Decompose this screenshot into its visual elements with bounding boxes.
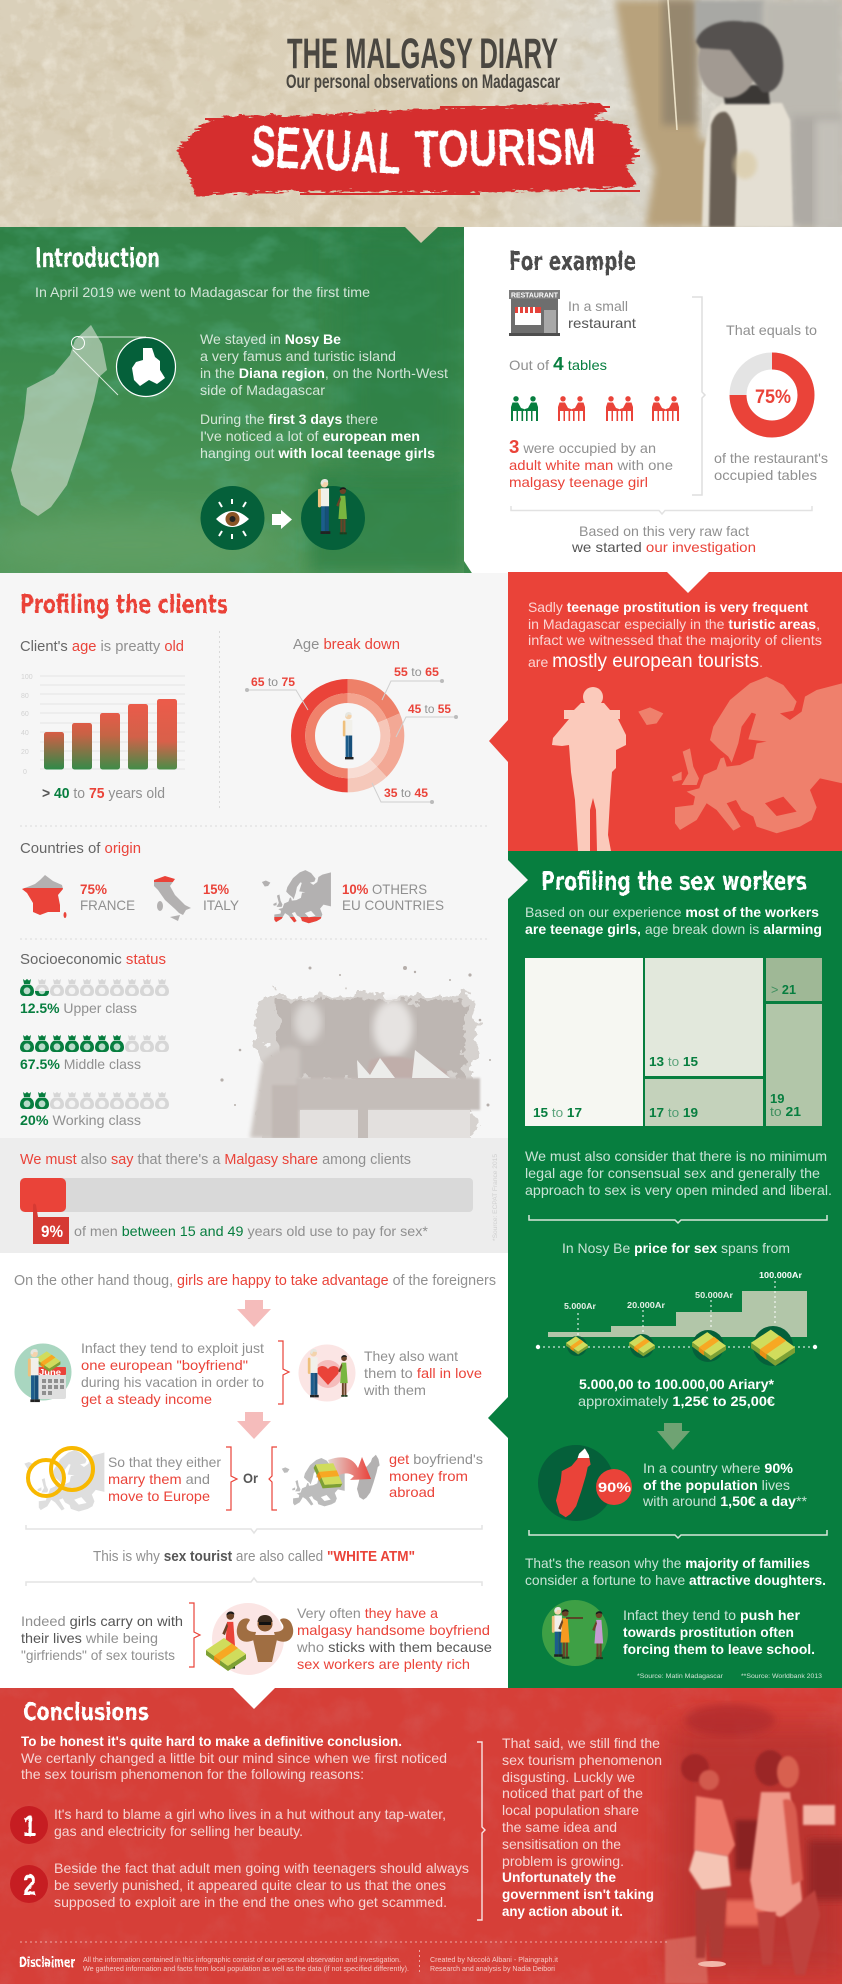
icon: man with calendar and money xyxy=(14,1344,72,1402)
chart: price steps xyxy=(536,1271,817,1366)
map of Madagascar xyxy=(11,325,107,516)
panel: teenage prostitution xyxy=(489,572,842,851)
bar chart: age: 80 xyxy=(21,693,29,700)
bracket xyxy=(692,297,705,495)
text: one boyfriend: one european "boyfriend" xyxy=(81,1357,248,1373)
text: population: In a country where 90% xyxy=(643,1460,794,1476)
panel: profiling the clients xyxy=(0,573,508,1155)
text: reason 1: It's hard to blame a girl who lives in a hut without any tap-water, xyxy=(54,1806,446,1822)
text: push her xyxy=(623,1607,815,1657)
text: intro to conclusion: the sex tourism phenomenon for the following reasons: xyxy=(21,1766,364,1782)
text: girls carry on: their lives while being xyxy=(21,1630,158,1646)
text: money from abroad: money from xyxy=(389,1468,468,1484)
icon: couple with heart xyxy=(298,1344,356,1402)
heading: socioeconomic status: Socioeconomic status xyxy=(20,951,166,968)
text: small restaurant: In a small xyxy=(568,298,628,314)
treemap: age break down: 15 to 17 xyxy=(533,1105,582,1120)
heading: countries of origin: Countries of origin xyxy=(20,840,141,857)
map: France xyxy=(22,875,66,918)
text: still disgusting xyxy=(502,1735,662,1919)
icons: upper class bags xyxy=(20,979,169,996)
brackets with Or xyxy=(226,1447,277,1510)
text: small restaurant: restaurant xyxy=(568,315,636,331)
text: investigation: Based on this very raw fact xyxy=(579,523,749,539)
icon: restaurant xyxy=(509,290,560,336)
callouts: age labels xyxy=(245,665,458,804)
text: three were occupied: 3 were occupied by an xyxy=(509,437,656,457)
panel: malgasy share xyxy=(0,1138,508,1253)
text: investigation: we started our investigation xyxy=(571,539,756,555)
text: other EU share: EU COUNTRIES xyxy=(342,897,444,913)
arrow xyxy=(272,510,292,529)
brace xyxy=(529,1215,827,1223)
text: Nosy Be: We stayed in Nosy Be xyxy=(200,331,341,347)
text: families: consider a fortune to have attractive doughters. xyxy=(525,1572,826,1588)
text: fall in love: with them xyxy=(363,1382,426,1398)
text: one boyfriend xyxy=(81,1340,264,1407)
text: three were occupied: malgasy teenage girl xyxy=(509,474,648,490)
text: Nosy Be: a very famus and turistic island xyxy=(200,348,396,364)
text: still disgusting: sex tourism phenomenon xyxy=(502,1752,662,1768)
icon: tourist silhouette xyxy=(552,687,626,851)
panel: introduction xyxy=(0,227,472,573)
text: still disgusting: disgusting. Luckly we xyxy=(502,1769,635,1785)
text: money from abroad: abroad xyxy=(389,1484,435,1500)
badge: reason 1 xyxy=(10,1806,48,1844)
text: France share: FRANCE xyxy=(80,897,135,913)
arrow to example panel xyxy=(464,561,485,625)
arrow down xyxy=(657,1423,690,1450)
text: three were occupied xyxy=(509,437,673,490)
text: reason 1: gas and electricity for selling her beauty. xyxy=(54,1823,303,1839)
donut: 75 percent xyxy=(738,361,806,429)
text: still disgusting: any action about it. xyxy=(502,1903,623,1919)
text: occupied tables: of the restaurant's xyxy=(714,450,828,466)
panel: conclusions xyxy=(0,1688,842,1984)
icon: Madagascar 90 percent: 90% xyxy=(598,1479,632,1495)
text: one boyfriend: Infact they tend to exploit just xyxy=(81,1340,264,1356)
treemap: age break down: to 21 xyxy=(770,1104,801,1119)
icon: restaurant: RESTAURANT xyxy=(511,292,559,300)
text: fall in love: They also want xyxy=(364,1348,458,1364)
footnotes: *Source: Matin Madagascar xyxy=(637,1673,724,1680)
map: Europe xyxy=(638,677,842,833)
text: price amount: 5.000,00 to 100.000,00 Ariary* xyxy=(579,1376,775,1392)
text: push her: towards prostitution often xyxy=(623,1624,794,1640)
text: handsome boyfriend: malgasy handsome boyfriend xyxy=(297,1622,490,1638)
text: girls carry on: Indeed girls carry on with xyxy=(21,1613,183,1629)
bar chart: age: 20 xyxy=(21,749,29,756)
text: intro to conclusion xyxy=(21,1733,447,1782)
text: still disgusting: the same idea and xyxy=(502,1819,617,1835)
icon: man and teenage girl xyxy=(301,479,365,550)
text: fall in love xyxy=(363,1348,482,1398)
text: money from abroad xyxy=(389,1451,483,1500)
heading: profiling the clients: Profiling the clients xyxy=(20,590,228,620)
text: price amount xyxy=(578,1376,775,1409)
progress bar: 9 percent xyxy=(20,1178,473,1244)
bar chart: age: 100 xyxy=(21,674,33,681)
text: still disgusting: That said, we still find the xyxy=(502,1735,660,1751)
text: handsome boyfriend: Very often they have a xyxy=(297,1605,438,1621)
brace xyxy=(26,1578,482,1586)
bar chart: age: 60 xyxy=(21,711,29,718)
text: legal age: legal age for consensual sex and generally the xyxy=(525,1165,820,1181)
icon: girl with muscular boyfriend xyxy=(206,1603,293,1675)
text: other EU share xyxy=(342,881,444,913)
text: teenage prostitution xyxy=(528,599,822,672)
text: marry: marry them and xyxy=(108,1471,210,1487)
text: population: with around 1,50€ a day** xyxy=(642,1493,808,1509)
heading: age break down: Age break down xyxy=(293,636,400,653)
text: population xyxy=(642,1460,808,1509)
text: occupied tables: occupied tables xyxy=(714,467,817,483)
chart: price steps: 50.000Ar xyxy=(695,1291,733,1300)
text: working class: 20% Working class xyxy=(20,1112,141,1128)
header: paper photo background xyxy=(0,0,842,227)
icon: man with calendar and money: June xyxy=(39,1368,62,1377)
arrow down xyxy=(237,1412,271,1439)
text: reason 2 xyxy=(54,1860,469,1910)
icon: Madagascar 90 percent xyxy=(538,1445,632,1521)
text: Nosy Be xyxy=(200,331,448,398)
text: equals: That equals to xyxy=(726,322,817,338)
icons: four tables xyxy=(511,396,679,421)
text: disclaimer xyxy=(83,1955,409,1973)
icon: wedding rings over Europe xyxy=(24,1448,104,1511)
donut: age break down xyxy=(291,679,404,792)
treemap: age break down: 19 xyxy=(770,1091,784,1106)
text: still disgusting: noticed that part of the xyxy=(502,1785,643,1801)
callouts: age labels: 35 to 45 xyxy=(384,786,428,800)
icon: parents pushing daughter xyxy=(542,1600,608,1666)
text: price span: In Nosy Be price for sex spans from xyxy=(562,1240,790,1256)
badge: reason 2 xyxy=(10,1865,48,1903)
text: first days xyxy=(200,411,435,461)
text: girls carry on xyxy=(21,1613,183,1663)
callouts: age labels: 65 to 75 xyxy=(251,675,295,689)
text: disclaimer: We gathered information and facts from local population as well as the data (if not specified differently). xyxy=(83,1964,409,1973)
text: population: of the population lives xyxy=(643,1477,790,1493)
text: France share: 75% xyxy=(80,881,108,897)
text: teenage prostitution: are mostly european tourists. xyxy=(528,651,763,672)
text: Italy share xyxy=(203,881,240,913)
text: still disgusting: sensitisation on the xyxy=(502,1836,621,1852)
text: reason 1 xyxy=(54,1806,446,1839)
text: marry xyxy=(108,1454,221,1504)
text: age range: > 40 to 75 years old xyxy=(42,785,165,802)
treemap: age break down: 13 to 15 xyxy=(649,1054,698,1069)
text: teenage girls xyxy=(525,904,822,937)
text: one boyfriend: during his vacation in order to xyxy=(81,1374,264,1390)
arrow to white panel xyxy=(488,1397,508,1438)
title: THE MALGASY DIARY xyxy=(287,30,558,78)
treemap: age break down xyxy=(525,958,822,1126)
chart: price steps: 20.000Ar xyxy=(627,1301,665,1310)
text: reason 2: Beside the fact that adult men going with teenagers should always xyxy=(54,1860,469,1876)
text: girls carry on: "girfriends" of sex tourists xyxy=(21,1647,175,1663)
footnotes: **Source: Worldbank 2013 xyxy=(741,1673,822,1680)
text: Nosy Be: side of Madagascar xyxy=(200,382,325,398)
text: middle class: 67.5% Middle class xyxy=(20,1056,141,1072)
text: handsome boyfriend: who sticks with them because xyxy=(296,1639,492,1655)
brace xyxy=(511,506,812,514)
callout: Nosy Be zoom xyxy=(72,336,176,396)
text: teenage prostitution: Sadly teenage prostitution is very frequent xyxy=(528,599,808,615)
heading: disclaimer: Disclaimer xyxy=(19,1955,75,1971)
text: teenage girls: Based on our experience most of the workers xyxy=(525,904,819,920)
text: first days: I've noticed a lot of european men xyxy=(200,428,420,444)
bracket xyxy=(189,1603,200,1667)
text: legal age xyxy=(525,1148,832,1198)
text: families: That's the reason why the majority of families xyxy=(525,1555,810,1571)
text: first days: hanging out with local teenage girls xyxy=(200,445,435,461)
text: one boyfriend: get a steady income xyxy=(81,1391,212,1407)
source note: *Source: ECPAT France 2015 xyxy=(492,1154,499,1241)
notch xyxy=(508,860,528,899)
text: France share xyxy=(80,881,135,913)
brace xyxy=(529,1530,827,1538)
donut: 75 percent: 75% xyxy=(755,387,791,408)
intro sentence: In April 2019 we went to Madagascar for the first time xyxy=(35,284,370,300)
treemap: age break down: > 21 xyxy=(771,982,796,997)
text: upper class: 12.5% Upper class xyxy=(20,1000,137,1016)
text: push her: Infact they tend to push her xyxy=(623,1607,801,1623)
text: legal age: We must also consider that there is no minimum xyxy=(525,1148,827,1164)
red brush banner with main title: SEXUAL xyxy=(249,114,403,187)
subtitle: Our personal observations on Madagascar xyxy=(286,72,560,93)
text: other EU share: 10% OTHERS xyxy=(342,881,427,897)
icon: eye xyxy=(200,486,264,550)
text: reason 2: supposed to exploit are in the end the ones who get scammed. xyxy=(54,1894,447,1910)
bracket xyxy=(278,1341,289,1404)
text: malgasy share: We must also say that there's a Malgasy share among clients xyxy=(20,1152,411,1168)
text: marry: move to Europe xyxy=(108,1488,210,1504)
text: investigation xyxy=(571,523,756,555)
text: three were occupied: adult white man with one xyxy=(509,457,673,473)
red brush banner with main title: TOURISM xyxy=(414,118,596,179)
text: handsome boyfriend: sex workers are plenty rich xyxy=(297,1656,470,1672)
text: lead sentence: On the other hand thoug, girls are happy to take advantage of the foreigners xyxy=(14,1273,496,1289)
notch xyxy=(667,572,709,593)
text: credits: Created by Niccolò Albani - Plaingraph.it xyxy=(430,1955,559,1964)
text: families xyxy=(525,1555,826,1588)
icons: middle class bags xyxy=(20,1035,169,1052)
text: still disgusting: local population share xyxy=(502,1802,639,1818)
heading: for example: For example xyxy=(509,247,636,277)
arrow to clients xyxy=(489,720,508,762)
chart: price steps: 5.000Ar xyxy=(564,1302,596,1311)
text: push her: forcing them to leave school. xyxy=(623,1641,815,1657)
text: still disgusting: government isn't taking xyxy=(502,1886,654,1902)
text: handsome boyfriend xyxy=(296,1605,492,1672)
text: intro to conclusion: We certanly changed a little bit our mind since when we first noticed xyxy=(21,1750,447,1766)
text: men paying: of men between 15 and 49 years old use to pay for sex* xyxy=(74,1223,429,1239)
photo: girl by the wall xyxy=(696,21,793,227)
brackets with Or: Or xyxy=(243,1470,259,1486)
text: teenage prostitution: infact we witnessed that the majority of clients xyxy=(528,632,822,648)
text: credits xyxy=(430,1955,559,1973)
text: disclaimer: All the information contained in this infographic consist of our personal observation and investigation. xyxy=(83,1955,401,1964)
icons: working class bags xyxy=(20,1092,169,1109)
bar chart: age xyxy=(21,674,185,776)
text: small restaurant xyxy=(568,298,636,331)
footnotes xyxy=(637,1673,822,1680)
badge: reason 2: 2 xyxy=(23,1869,36,1902)
progress bar: 9 percent: 9% xyxy=(41,1222,63,1241)
text: four tables: Out of 4 tables xyxy=(509,354,607,374)
heading: introduction: Introduction xyxy=(35,243,160,274)
text: white ATM: This is why sex tourist are also called "WHITE ATM" xyxy=(93,1549,415,1565)
text: Italy share: 15% xyxy=(203,881,230,897)
treemap: age break down: 17 to 19 xyxy=(649,1105,698,1120)
callouts: age labels: 45 to 55 xyxy=(408,702,451,716)
heading: conclusions: Conclusions xyxy=(23,1698,149,1726)
text: reason 2: be severly punished, it appeared quite clear to us that the ones xyxy=(54,1877,446,1893)
bar chart: age: 40 xyxy=(21,730,29,737)
icon: money from Europe to Madagascar xyxy=(282,1455,380,1506)
text: credits: Research and analysis by Nadia Deibori xyxy=(430,1964,555,1973)
bar chart: age: 0 xyxy=(23,769,27,776)
text: price amount: approximately 1,25€ to 25,00€ xyxy=(578,1393,775,1409)
text: occupied tables xyxy=(714,450,828,483)
callouts: age labels: 55 to 65 xyxy=(394,665,439,679)
notch xyxy=(233,1688,275,1709)
text: first days: During the first 3 days there xyxy=(200,411,378,427)
panel: girls take advantage xyxy=(0,1253,508,1688)
red brush banner with main title xyxy=(177,103,642,196)
text: teenage prostitution: in Madagascar especially in the turistic areas, xyxy=(528,616,820,632)
badge: reason 1: 1 xyxy=(23,1810,36,1843)
chart: price steps: 100.000Ar xyxy=(759,1271,802,1280)
text: still disgusting: problem is growing. xyxy=(502,1853,624,1869)
photo: client with teenage girl, blurred xyxy=(220,966,491,1155)
text: legal age: approach to sex is very open minded and liberal. xyxy=(525,1182,832,1198)
map: other EU xyxy=(262,870,331,923)
text: client age: Client's age is preatty old xyxy=(20,638,184,655)
text: Nosy Be: in the Diana region, on the North-West xyxy=(200,365,448,381)
map: Italy xyxy=(154,876,191,921)
arrow down xyxy=(237,1300,271,1327)
panel: profiling the sex workers xyxy=(488,851,842,1688)
text: intro to conclusion: To be honest it's quite hard to make a definitive conclusion. xyxy=(21,1733,402,1749)
text: teenage girls: are teenage girls, age break down is alarming xyxy=(525,921,822,937)
brace xyxy=(26,1525,482,1533)
text: fall in love: them to fall in love xyxy=(364,1365,482,1381)
notch into header xyxy=(405,227,438,243)
text: money from abroad: get boyfriend's xyxy=(389,1451,483,1467)
text: marry: So that they either xyxy=(108,1454,221,1470)
text: Italy share: ITALY xyxy=(203,897,240,913)
bracket xyxy=(477,1742,485,1920)
text: still disgusting: Unfortunately the xyxy=(502,1869,616,1885)
panel: for example xyxy=(485,227,842,573)
